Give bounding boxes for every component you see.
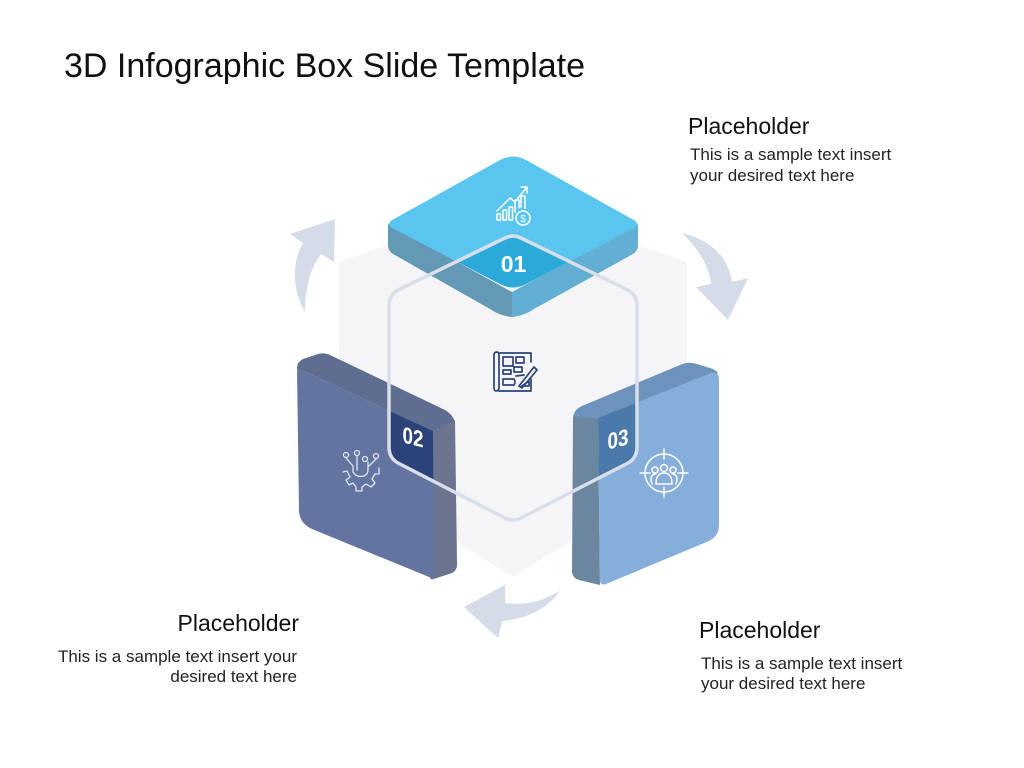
arrow: bottom — [464, 585, 561, 638]
box 02: left — [297, 353, 457, 579]
heading 03: Placeholder — [699, 617, 821, 643]
text block: placeholder 01 — [688, 113, 892, 185]
box 01 right side — [512, 224, 638, 317]
box 02 top strip — [297, 353, 455, 431]
icon: gear circuit — [343, 450, 379, 491]
box 02 number area — [390, 412, 434, 480]
box 02 front surface — [297, 368, 434, 579]
text block: placeholder 02 — [58, 610, 299, 686]
body 03: your desired text here — [701, 674, 865, 693]
icon: growth chart: $ — [520, 214, 526, 225]
box 03 front surface — [598, 373, 719, 584]
number 02: 02 — [403, 422, 423, 453]
box 03 number area — [598, 403, 636, 476]
box 01: top — [388, 156, 638, 317]
hexagon outline — [389, 236, 637, 520]
box 01 left side — [388, 224, 512, 317]
arrow: upper left — [290, 219, 335, 312]
heading 02: Placeholder — [178, 610, 299, 636]
arrow: upper right — [682, 233, 748, 320]
body 02: This is a sample text insert your — [58, 647, 297, 666]
box 01 top surface — [389, 156, 637, 288]
number 03: 03 — [608, 424, 629, 455]
icon: target group — [640, 449, 688, 497]
body 01: This is a sample text insert — [690, 145, 891, 164]
box 03: right — [572, 363, 719, 585]
icon: blueprint — [494, 352, 537, 391]
title: 3D Infographic Box Slide Template — [64, 47, 585, 85]
text block: placeholder 03 — [699, 617, 903, 693]
heading 01: Placeholder — [688, 113, 810, 139]
body 03: This is a sample text insert — [701, 654, 902, 673]
body 02: desired text here — [170, 667, 297, 686]
box 03 top strip — [573, 363, 718, 419]
box 01 number area — [458, 238, 568, 288]
icon: growth chart — [497, 187, 530, 225]
background cube — [343, 205, 683, 572]
number 01: 01 — [501, 251, 526, 277]
box 02 right side — [430, 420, 457, 579]
body 01: your desired text here — [690, 166, 854, 185]
box 03 left side — [572, 417, 600, 585]
